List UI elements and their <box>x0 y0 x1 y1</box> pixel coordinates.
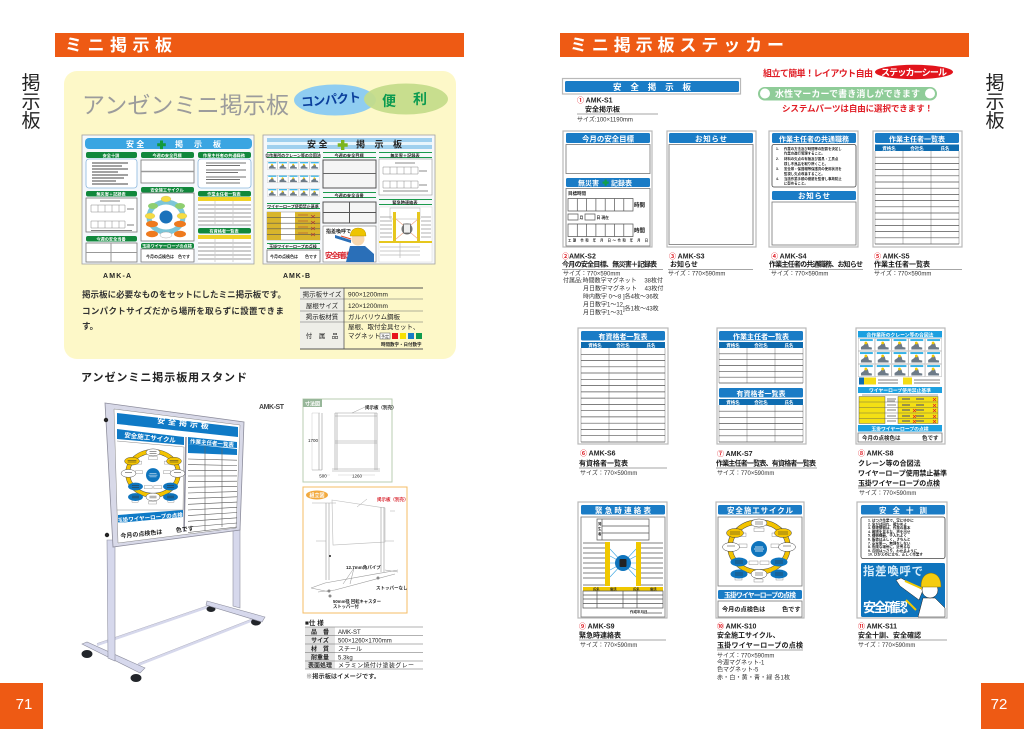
caption S8: ワイヤーロープ使用禁止基準 <box>858 468 947 478</box>
caption S7: サイズ：770×590mm <box>717 469 774 477</box>
stand specification table: ■仕 様 <box>305 618 324 627</box>
caption S8: クレーン等の合図法 <box>858 458 921 468</box>
left page heading bar: ミニ掲示板 <box>65 36 172 55</box>
caption S10: サイズ：770×590mm <box>717 652 774 660</box>
sticker S4: 4. <box>776 177 779 181</box>
stand specification table: 耐重量 <box>311 654 329 662</box>
caption AMK-A: AMK-A <box>103 273 131 280</box>
board check text: 今月の点検色は 色です <box>120 524 194 540</box>
panel: assembly drawing: ストッパー付 <box>333 603 359 610</box>
board image: AMK-B: 掲 示 板 <box>356 138 402 150</box>
board image: AMK-B: ワイヤーロープ使用禁止基準 <box>267 203 319 209</box>
spec table: 900×1200mm <box>348 292 388 298</box>
stand specification table: 500×1260×1700mm <box>338 638 392 644</box>
sticker S2 <box>562 131 663 316</box>
spec table <box>300 288 423 349</box>
sticker S2: 工期 令和 年 月 日～令和 年 月 日 <box>568 238 648 242</box>
sticker S7: 会社名 <box>754 342 768 349</box>
spec table: 予定 <box>381 333 389 339</box>
promo pill: marker <box>758 87 937 100</box>
caption S2: 月日数字1～12 <box>583 300 624 308</box>
right side index label: 掲 <box>985 72 1005 94</box>
panel: assembly drawing: 組立図 <box>309 492 325 499</box>
board image: AMK-A: 今月の点検色は <box>146 253 174 259</box>
caption S1: サイズ:100×1190mm <box>577 116 633 124</box>
sticker S5: 氏名 <box>940 145 950 152</box>
promo line: easy assembly <box>763 65 953 79</box>
sticker S6 <box>578 328 668 477</box>
sticker S2: 時間 <box>634 226 646 234</box>
sticker S5 <box>873 131 962 278</box>
section tabs: 有資格者一覧表 <box>209 228 239 235</box>
caption S6: サイズ：770×590mm <box>580 469 637 477</box>
panel: assembly drawing: 掲示板（別売） <box>377 496 408 503</box>
sticker S8: ワイヤーロープ使用禁止基準 <box>869 387 931 394</box>
stand model code: AMK-ST <box>259 404 285 411</box>
caption S11: 安全十訓、安全確認 <box>858 630 921 640</box>
stand specification table: 品 番 <box>311 628 329 636</box>
right page heading bar <box>560 33 969 57</box>
signal illustrations <box>267 162 320 196</box>
stand specification table: ※掲示板はイメージです。 <box>306 672 380 680</box>
board image: AMK-A: 安 全 <box>126 139 144 149</box>
caption S5: サイズ：770×590mm <box>874 270 931 278</box>
right page number tab <box>981 683 1024 729</box>
caption S7 <box>716 450 817 477</box>
caption S1 <box>577 96 658 124</box>
sticker S4: 作業主任者の共通職務 <box>779 134 849 144</box>
badge: compact: コンパクト <box>301 90 361 110</box>
badge: convenient: 便 <box>382 93 396 109</box>
worker illustration: 指差喚呼で <box>326 228 351 235</box>
panel: dimension drawing: 掲示板（別売） <box>365 404 396 411</box>
board header: 安 全 掲 示 板 <box>157 415 209 431</box>
board tab: list: 作業主任者一覧表 <box>190 437 235 449</box>
board image: AMK-B: 色です <box>305 253 317 259</box>
panel: mini board product <box>64 71 456 359</box>
sticker S9: 氏名 <box>593 586 600 592</box>
sticker S4: 作業の方法及び時間等の配置を決定し <box>784 146 842 151</box>
sticker S4: 検し不良品を取り除くこと。 <box>784 161 828 166</box>
caption S1: ① AMK-S1 <box>577 96 613 104</box>
sticker S2: 目標時間 <box>568 190 586 197</box>
left page number tab <box>0 683 43 729</box>
caption S2: サイズ：770×590mm <box>563 270 620 278</box>
panel: dimension drawing: 1700 <box>308 438 319 443</box>
spec table: 120×1200mm <box>348 303 388 310</box>
stand specification table: 5.3kg <box>338 656 353 662</box>
description text: す。 <box>82 321 98 331</box>
board tab: cycle <box>117 429 184 445</box>
sticker S1 <box>562 78 740 124</box>
caption S6: 有資格者一覧表 <box>579 458 628 468</box>
sticker S9: 生 <box>598 526 602 531</box>
sticker S10: 色です <box>782 606 801 614</box>
sticker S11 <box>857 502 947 649</box>
caption S9: 緊急時連絡表 <box>579 630 621 640</box>
caption S10 <box>717 622 803 682</box>
board table <box>188 444 237 532</box>
panel: dimension drawing: 寸法図 <box>305 400 320 408</box>
sticker S10: 玉掛ワイヤーロープの点検 <box>724 590 796 600</box>
caption S11: サイズ：770×590mm <box>858 641 915 649</box>
caption S7: ⑦ AMK-S7 <box>717 450 753 458</box>
board image: AMK-A: 色です <box>178 253 190 259</box>
spec table: マグネット <box>348 331 380 340</box>
caption S4: ④ AMK-S4 <box>771 252 807 260</box>
caption S2: 月日数字1～31 <box>583 308 624 316</box>
sticker S3 <box>667 131 756 278</box>
sticker S11: 1. はつき作業で、常にゆかに <box>868 518 914 522</box>
sticker S11: 4. 確認を怠るな、声を出せ <box>868 529 911 534</box>
sticker S9: 作成年月日 <box>630 609 648 614</box>
caption S11 <box>858 622 947 649</box>
spec table: 付 属 品 <box>306 331 338 340</box>
left page number tab: 71 <box>16 696 32 713</box>
left side index label <box>21 72 41 132</box>
crane signal grid <box>858 338 942 377</box>
stand heading: アンゼンミニ掲示板用スタンド <box>81 370 247 384</box>
caption S7: 作業主任者一覧表、有資格者一覧表 <box>716 458 816 468</box>
spec table: ガルバリウム鋼板 <box>348 312 400 321</box>
sticker S5: 作業主任者一覧表 <box>889 134 945 144</box>
sticker S6: 会社名 <box>616 342 630 349</box>
stand photo <box>82 403 265 682</box>
panel: assembly drawing: 50mm径 回転キャスター <box>333 598 381 605</box>
sticker S2: 無災害 <box>578 178 599 188</box>
promo line: easy assembly: ステッカーシール <box>881 68 947 78</box>
panel: assembly drawing <box>303 487 408 613</box>
stand specification table: 表面処理 <box>308 662 332 670</box>
caption S3: ③ AMK-S3 <box>669 252 705 260</box>
caption S8 <box>858 450 947 497</box>
section tabs: 安全施工サイクル <box>150 187 184 194</box>
sticker S6: 資格名 <box>588 342 602 349</box>
sticker S3: お知らせ <box>695 134 727 144</box>
caption S5: ⑤ AMK-S5 <box>874 252 910 260</box>
board tab: cycle: 安全施工サイクル <box>124 430 177 445</box>
sticker S11: 10. ひかえめに立ち、正しく作業す <box>868 552 923 557</box>
board image: AMK-A: 掲 示 板 <box>175 139 221 149</box>
section tabs: 今週の安全目標 <box>152 152 182 159</box>
caption S8: 玉掛ワイヤーロープの点検 <box>858 478 940 488</box>
sticker S11: 6. 服装は正しく、きちんと <box>868 536 910 542</box>
sticker S4: 監視し欠点改善すること。 <box>784 171 825 176</box>
caption S9: サイズ：770×590mm <box>580 641 637 649</box>
worker illustration <box>323 226 376 262</box>
caption S10: ⑩ AMK-S10 <box>717 622 757 630</box>
caption S4: サイズ：770×590mm <box>771 270 828 278</box>
sticker S4: 1. <box>776 147 779 151</box>
caption S4 <box>769 252 863 278</box>
pointing check illustration: 安全確認 <box>863 600 908 615</box>
badge: compact <box>294 84 376 116</box>
sticker S9: 電話 <box>650 586 657 592</box>
sticker S2: 記録表 <box>611 178 632 188</box>
sticker S4: 2. <box>776 157 779 161</box>
description text <box>82 290 286 331</box>
board image: AMK-B: 無災害＋記録表 <box>390 152 420 159</box>
sticker S10: 今月の点検色は <box>722 606 765 614</box>
caption S3: サイズ：770×590mm <box>668 270 725 278</box>
sticker S7: 会社名 <box>754 399 768 406</box>
panel: dimension drawing: 1260 <box>352 474 363 478</box>
sticker S4: 材料の欠点の有無及び器具・工具点 <box>784 156 839 161</box>
board image: AMK-B <box>263 135 435 264</box>
right side index label <box>985 72 1005 132</box>
pointing check illustration: 指差喚呼で <box>863 564 923 578</box>
sticker S5: 資格名 <box>882 145 896 152</box>
caption S6: ⑥ AMK-S6 <box>580 450 616 458</box>
description text: コンパクトサイズだから場所を取らずに設置できま <box>82 306 284 316</box>
spec table: 時間数字・日付数字 <box>381 341 422 348</box>
board header <box>117 413 238 437</box>
sticker S11: 7. 安全第一、無理をしない <box>868 540 911 545</box>
caption S1: 安全掲示板 <box>585 104 620 114</box>
caption S10: 赤・白・黄・青・緑 各1枚 <box>717 674 790 682</box>
sticker S11: 3. 整理整頓は、作業の基本 <box>868 525 911 530</box>
panel: dimension drawing <box>303 399 396 482</box>
caption S4: 作業主任者の共通職務、お知らせ <box>769 260 863 268</box>
sticker S10: 安全施工サイクル <box>727 505 794 515</box>
sticker S9: 者 <box>598 531 602 536</box>
caption S9 <box>579 622 666 649</box>
cycle diagram <box>722 519 796 582</box>
board image: AMK-B: 今月の点検色は <box>270 253 298 259</box>
caption S5: 作業主任者一覧表 <box>874 260 930 268</box>
sticker S9: 緊急時連絡表 <box>595 505 652 515</box>
promo line: system parts: システムパーツは自由に選択できます！ <box>782 104 933 114</box>
sticker S6: 有資格者一覧表 <box>598 332 648 341</box>
section tabs: 今週の安全当番 <box>96 236 126 243</box>
caption S10: 色マグネット-5 <box>717 666 759 674</box>
sticker S7 <box>716 328 817 477</box>
left page heading bar <box>55 33 464 57</box>
caption S3: お知らせ <box>670 260 698 268</box>
sticker S11: 9. 合図はっきり、わかるように <box>868 548 918 553</box>
board tab: wire rope: 玉掛ワイヤーロープの点検 <box>117 511 184 524</box>
sticker S4 <box>769 131 863 278</box>
caption S2: 時内数字 0～8 ]各4枚～36枚 <box>583 292 659 300</box>
sticker S11: 5. 機械機器、手入れよく <box>868 533 907 538</box>
badge: convenient: 利 <box>413 91 427 107</box>
sticker S4: に努めること。 <box>784 180 808 186</box>
sticker S8: 玉掛ワイヤーロープの点検 <box>871 426 929 432</box>
sticker S4: 安全帯・保護帽等保護具の使用状況を <box>784 166 842 171</box>
right page number tab: 72 <box>991 696 1007 713</box>
sticker S9: 電話 <box>610 586 617 592</box>
sticker S11: 2. 急がば回れ、確かめよ <box>868 521 907 526</box>
spec table: 掲示板サイズ <box>303 290 342 298</box>
spec table: 屋根、取付金具セット、 <box>348 322 419 331</box>
sticker S8: 合作業所のクレーン等の合図法 <box>867 332 934 338</box>
sticker S8: 今月の点検色は <box>862 434 901 442</box>
sticker S9: 氏名 <box>633 586 640 592</box>
sticker S4: 3. <box>776 167 779 171</box>
board image: AMK-B: 今週の安全当番 <box>334 192 364 199</box>
caption S2: ]各1枚～43枚 <box>623 304 659 312</box>
caption S8: ⑧ AMK-S8 <box>858 450 894 458</box>
caption S9: ⑨ AMK-S9 <box>579 622 615 630</box>
worker illustration: 安全確認 <box>325 250 352 260</box>
spec table: 屋根サイズ <box>306 301 339 310</box>
product title: アンゼンミニ掲示板 <box>82 92 289 118</box>
panel: dimension drawing: 500 <box>319 474 327 478</box>
stand specification table: スチール <box>338 646 362 653</box>
left side index label: 掲 <box>21 72 41 94</box>
sticker S8: 色です <box>922 434 939 442</box>
board image: AMK-A <box>82 135 254 264</box>
right side index label: 示 <box>985 92 1005 113</box>
sticker S7: 氏名 <box>784 342 794 349</box>
section tabs: 作業主任者一覧表 <box>207 191 242 198</box>
stand specification table <box>305 618 423 680</box>
sticker S2: 日 現在 <box>596 215 609 220</box>
caption AMK-B: AMK-B <box>283 273 310 280</box>
sticker S7: 作業主任者一覧表 <box>733 332 789 341</box>
board image: AMK-B: 安 全 <box>307 138 328 150</box>
section tabs: 作業主任者の共通職務 <box>203 152 246 159</box>
board image: AMK-B: 玉掛ワイヤーロープの点検 <box>269 243 317 249</box>
caption S8: サイズ：770×590mm <box>859 489 916 497</box>
right side index label: 板 <box>985 110 1005 132</box>
sticker S9 <box>578 502 667 649</box>
sticker S8 <box>856 328 947 497</box>
board image: AMK-B: 合作業所のクレーン等の合図法 <box>265 152 321 158</box>
sticker S9: 発 <box>598 521 602 526</box>
sticker S10 <box>716 502 804 682</box>
stand specification table: AMK-ST <box>338 630 361 636</box>
stand specification table: メラミン焼付け塗装グレー <box>338 662 414 670</box>
promo pill: marker: 水性マーカーで書き消しができます <box>775 88 920 99</box>
sticker S7: 有資格者一覧表 <box>736 389 786 398</box>
caption S2: 今月の安全目標、無災害＋記録表 <box>562 260 657 268</box>
badge: convenient <box>364 84 448 114</box>
caption S3 <box>668 252 753 278</box>
sticker S4: 当該作業手順の徹底を監督し事故防止 <box>784 176 842 181</box>
caption S11: ⑪ AMK-S11 <box>858 622 897 630</box>
section tabs: 安全十訓 <box>103 152 119 159</box>
sticker S4: お知らせ <box>798 190 830 200</box>
caption S2 <box>562 252 663 316</box>
board image: AMK-B: 緊急時連絡表 <box>392 199 418 206</box>
left side index label: 示 <box>21 92 41 113</box>
sticker S6: 氏名 <box>646 342 656 349</box>
caption S2: 月日数字マグネット 43枚付 <box>583 284 663 292</box>
sticker S7: 氏名 <box>784 399 794 406</box>
description text: 掲示板に必要なものをセットにしたミニ掲示板です。 <box>82 290 286 300</box>
section tabs: 玉掛ワイヤーロープの点検 <box>142 243 193 250</box>
sticker S7: 資格名 <box>726 399 740 406</box>
panel: assembly drawing: ストッパーなし <box>376 584 408 592</box>
sticker S5: 会社名 <box>910 145 924 152</box>
caption S5 <box>874 252 962 278</box>
sticker S7: 資格名 <box>726 342 740 349</box>
board image: AMK-B: 今週の安全目標 <box>334 152 364 159</box>
sticker S1: 安 全 掲 示 板 <box>613 82 691 92</box>
sticker S2: 時間 <box>634 201 646 209</box>
sticker S11: 8. 危険な場所に、近寄るな <box>868 544 911 549</box>
caption S10: 玉掛ワイヤーロープの点検 <box>717 640 803 650</box>
sticker S4: 作業の進行管理すること。 <box>784 150 825 156</box>
stand specification table: サイズ <box>311 636 329 644</box>
pointing check illustration <box>861 563 945 617</box>
sticker S2: 今月の安全目標 <box>582 134 634 144</box>
caption S2: 付属品:時間数字マグネット 38枚付 <box>563 276 663 284</box>
section tabs <box>267 152 432 249</box>
panel: assembly drawing: 12.7mm角パイプ <box>346 564 381 571</box>
left side index label: 板 <box>21 110 41 132</box>
section tabs: 無災害＋記録表 <box>96 191 126 198</box>
sticker S11: 安 全 十 訓 <box>879 505 927 515</box>
section tabs <box>86 152 251 250</box>
caption S6 <box>579 450 667 477</box>
spec table: 掲示板材質 <box>306 312 339 321</box>
board cycle diagram <box>121 449 185 504</box>
caption S2: ②AMK-S2 <box>562 252 596 260</box>
stand specification table: 材 質 <box>311 645 329 653</box>
right page heading bar: ミニ掲示板ステッカー <box>570 36 784 55</box>
sticker S2: 月 <box>580 215 584 220</box>
caption S10: 安全施工サイクル、 <box>717 630 780 640</box>
promo line: easy assembly: 組立て簡単！レイアウト自由 <box>763 68 873 78</box>
caption S10: 今週マグネット-1 <box>717 658 765 666</box>
